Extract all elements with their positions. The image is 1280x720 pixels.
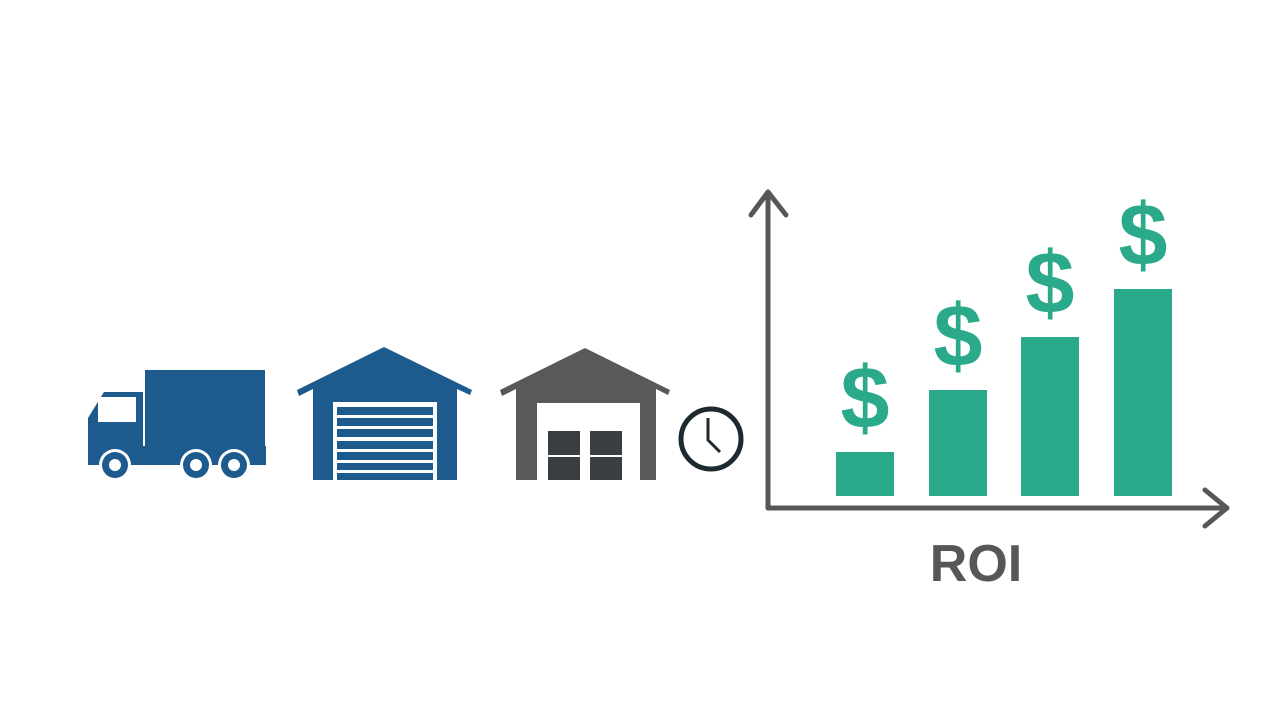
chart: ROI bar chart xyxy=(751,185,1227,526)
axes xyxy=(751,192,1227,526)
icon: clock xyxy=(681,409,741,469)
icon: warehouse with boxes xyxy=(500,348,670,480)
dollar signs: $ xyxy=(1119,185,1167,284)
dollar signs: $ xyxy=(934,286,982,385)
bars xyxy=(836,289,1172,496)
dollar signs: $ xyxy=(1026,233,1074,332)
dollar signs xyxy=(841,185,1167,447)
icon: delivery truck xyxy=(88,370,266,481)
icon: garage with roller door xyxy=(297,347,472,480)
label: ROI: ROI xyxy=(930,535,1022,593)
dollar signs: $ xyxy=(841,348,889,447)
